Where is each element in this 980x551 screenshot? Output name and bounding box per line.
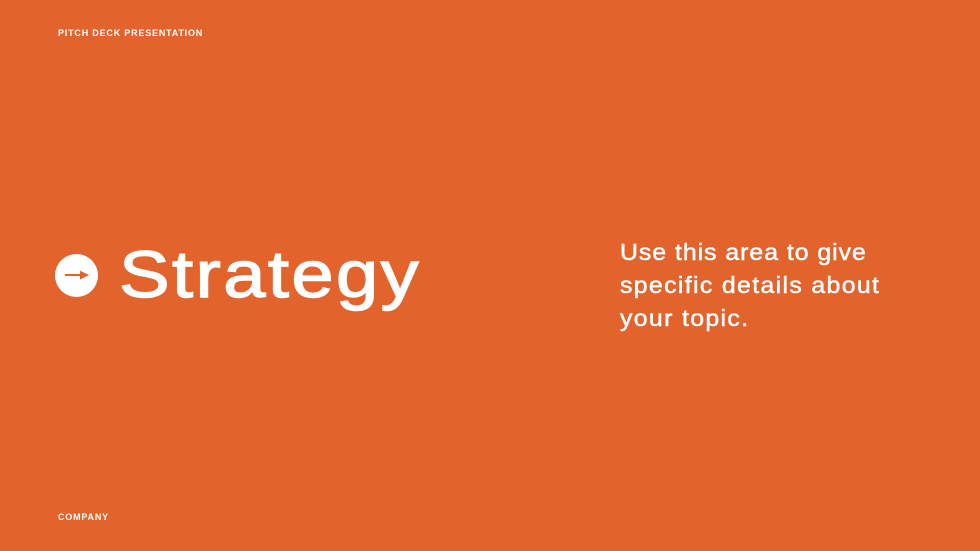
description text: specific details about xyxy=(620,272,880,298)
description text: your topic. xyxy=(620,305,749,331)
footer label: COMPANY xyxy=(58,512,109,522)
icon: arrow in circle xyxy=(55,254,98,297)
description text xyxy=(620,239,880,332)
header label: PITCH DECK PRESENTATION xyxy=(58,28,203,38)
title: Strategy xyxy=(119,237,421,311)
description text: Use this area to give xyxy=(620,239,867,265)
